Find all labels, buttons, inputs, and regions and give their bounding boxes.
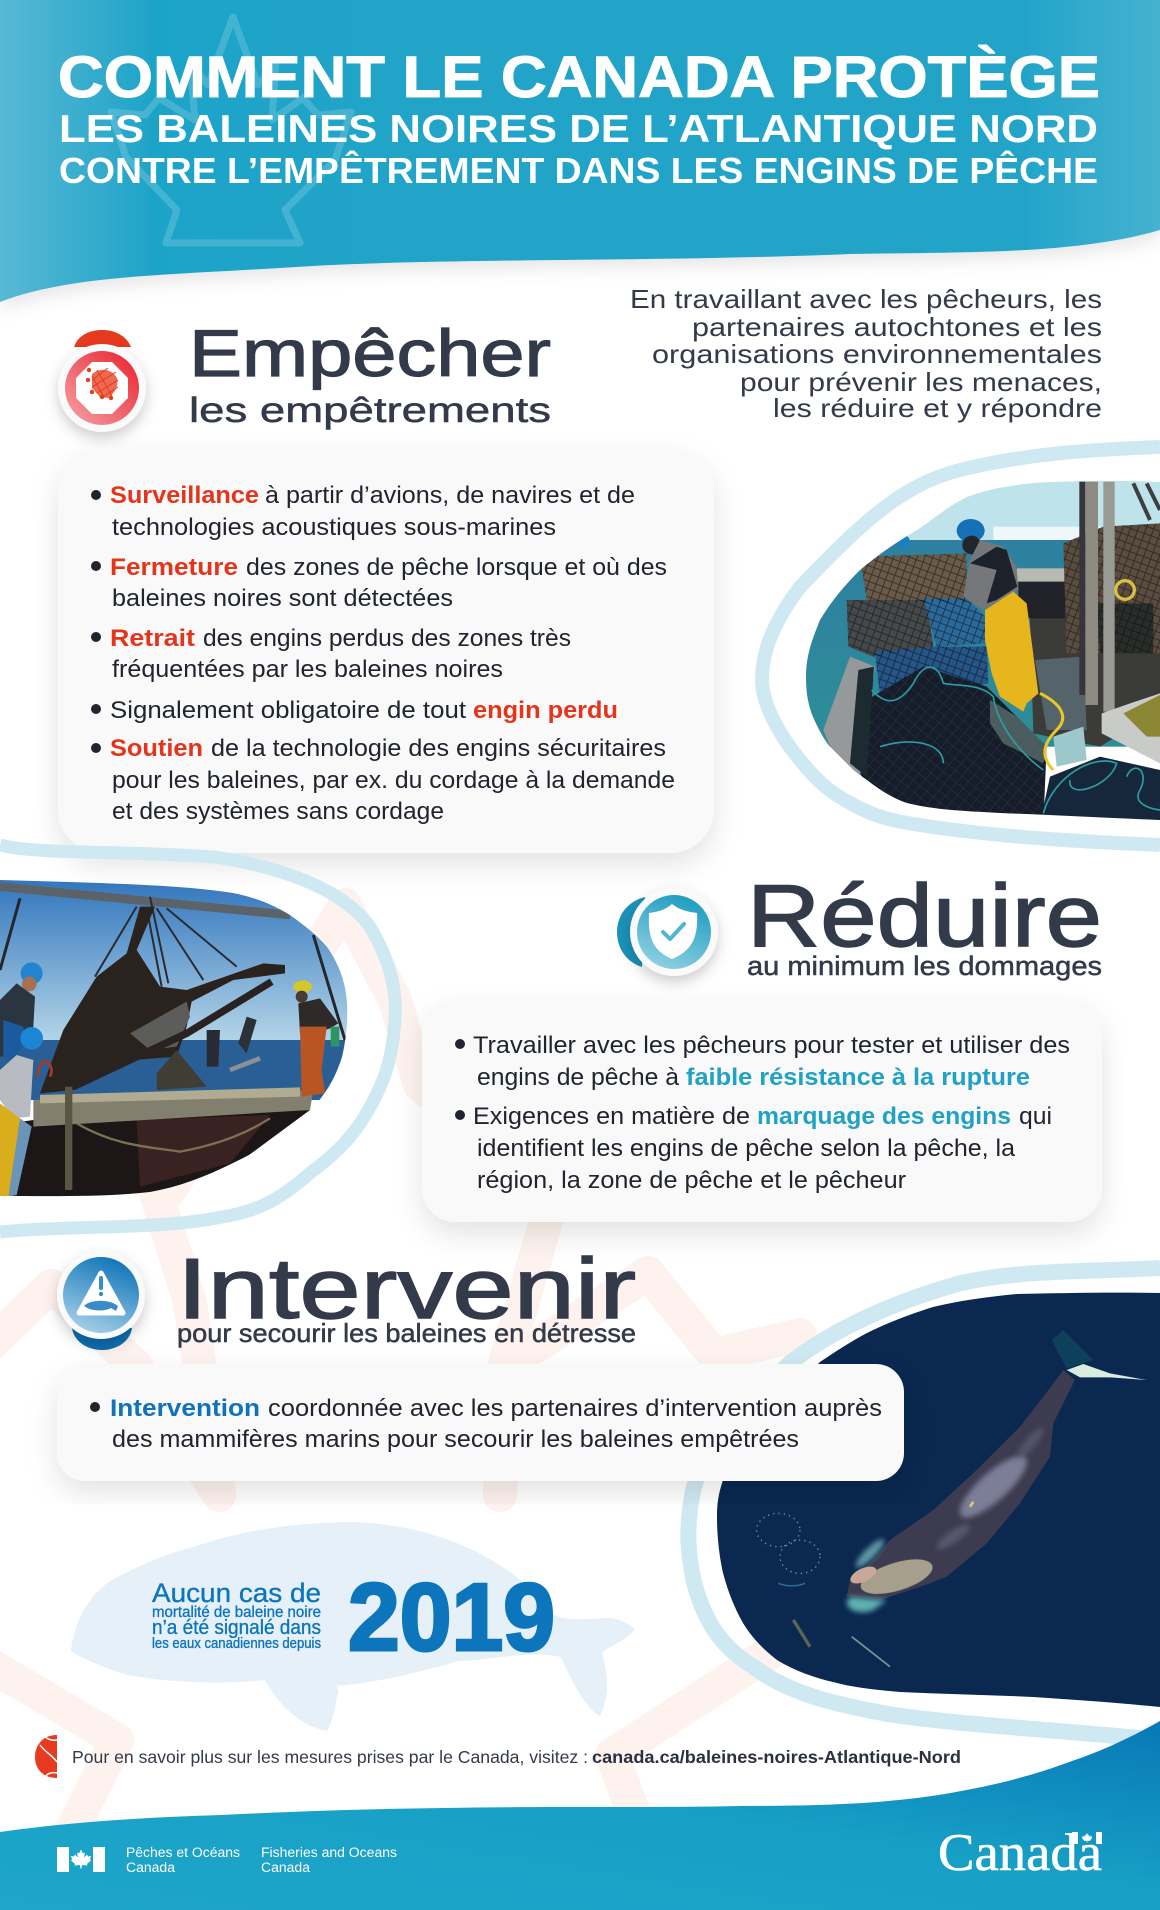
bullet list: reduce actions: engins de pêche à [477,1064,680,1091]
heading: Intervenir: pour secourir les baleines en détresse [177,1318,636,1348]
header band with title [0,0,1160,302]
bullet list: prevention actions: à partir d’avions, de navires et de [265,482,635,509]
icon: red half ball [35,1735,57,1778]
icon: shield with check mark [617,888,718,976]
bullet list: prevention actions: des engins perdus des zones très [203,625,571,652]
bullet list: prevention actions: Surveillance [110,482,259,509]
intro text [630,284,1102,423]
stat year: 2019 [348,1564,555,1671]
bullet list: prevention actions: Retrait [110,625,195,652]
icon: Canadian flag [57,1847,105,1872]
stat label: Aucun cas de [152,1578,321,1608]
bullet list: response action: des mammifères marins pour secourir les baleines empêtrées [112,1426,799,1453]
bullet list: response action: Intervention [110,1395,260,1422]
header background wave [0,0,1160,302]
icon: prevent net [58,330,146,432]
intro text: En travaillant avec les pêcheurs, les [630,284,1102,314]
bullet list: reduce actions: faible résistance à la rupture [686,1064,1030,1091]
photo: crew lifting fishing net from sea [0,870,360,1200]
stat label: n’a été signalé dans [152,1617,321,1639]
department name: Canada [261,1860,311,1875]
department name: Pêches et Océans [126,1845,240,1860]
stat label: les eaux canadiennes depuis [152,1636,321,1652]
ring around net photo [0,845,395,1232]
bullet list: reduce actions: marquage des engins [757,1103,1011,1130]
intro text: partenaires autochtones et les [692,312,1102,342]
title: CONTRE L’EMPÊTREMENT DANS LES ENGINS DE PÊCHE [59,149,1098,191]
stat label: mortalité de baleine noire [152,1604,321,1621]
bullet list: reduce actions: qui [1019,1103,1052,1130]
heading: Intervenir [177,1242,636,1348]
bullet list: reduce actions: Exigences en matière de [473,1103,750,1130]
whale silhouette [71,1522,635,1731]
department name [126,1845,397,1875]
bullet list: prevention actions: Fermeture [110,554,238,581]
signature: Government of Canada flag and department names [57,1845,397,1875]
title: COMMENT LE CANADA PROTÈGE [58,45,1100,110]
bullet list: reduce actions: région, la zone de pêche et le pêcheur [477,1167,906,1194]
heading: Empêcher [189,316,551,430]
icon: maple leaf outline [111,17,351,243]
bullet list: response action: coordonnée avec les partenaires d’intervention auprès [268,1395,882,1422]
bullet list: reduce actions: identifient les engins de pêche selon la pêche, la [477,1135,1016,1162]
ring around whale photo [688,1268,1160,1740]
footnote link text: canada.ca/baleines-noires-Atlantique-Nord [592,1747,961,1767]
footer band [0,1721,1160,1910]
heading: Empêcher: les empêtrements [189,391,551,430]
bullet list: prevention actions: de la technologie des engins sécuritaires [211,735,666,762]
bullet list: prevention actions: fréquentées par les baleines noires [112,656,503,683]
background: faint maple leaf outline [0,905,800,1830]
bullet list: prevention actions: baleines noires sont détectées [112,585,453,612]
icon: warning triangle with whale [57,1251,145,1350]
panel: response card [57,1364,904,1481]
footnote link text [72,1747,961,1767]
stat: no whale deaths since 2019 [71,1522,635,1731]
bullet list: response action [90,1395,882,1453]
ring around fishing boat photo [762,447,1160,845]
heading: Intervenir: Intervenir [177,1242,636,1337]
heading: Réduire: Réduire [747,866,1102,965]
heading: Empêcher: Empêcher [189,316,551,390]
department name: Canada [126,1860,176,1875]
bullet list: prevention actions: Signalement obligatoire de tout [110,697,466,724]
bullet list: prevention actions: technologies acoustiques sous-marines [112,514,556,541]
photo: fisherman on boat with traps and nets [800,470,1160,823]
bullet list: reduce actions [455,1032,1070,1194]
panel: reduce card [422,1000,1102,1222]
bullet list: prevention actions: des zones de pêche lorsque et où des [246,554,667,581]
bullet list: reduce actions: Travailler avec les pêcheurs pour tester et utiliser des [473,1032,1070,1059]
photo: right whale seen from above [700,1290,1160,1710]
Canada wordmark: Canada [938,1824,1102,1882]
department name: Fisheries and Oceans [261,1845,397,1860]
bullet list: prevention actions: engin perdu [473,697,618,724]
panel: prevention card [58,448,714,853]
title [58,45,1100,191]
intro text: organisations environnementales [652,339,1102,369]
bullet list: prevention actions: et des systèmes sans cordage [112,798,444,825]
heading: Réduire: au minimum les dommages [747,951,1102,981]
footnote link text: Pour en savoir plus sur les mesures prises par le Canada, visitez : [72,1747,588,1767]
intro text: pour prévenir les menaces, [740,367,1102,397]
bullet list: prevention actions: Soutien [110,735,203,762]
intro text: les réduire et y répondre [773,393,1102,423]
bullet list: prevention actions: pour les baleines, par ex. du cordage à la demande [112,767,675,794]
title: LES BALEINES NOIRES DE L’ATLANTIQUE NORD [59,108,1098,151]
bullet list: prevention actions [91,482,675,825]
stat label [152,1578,321,1652]
